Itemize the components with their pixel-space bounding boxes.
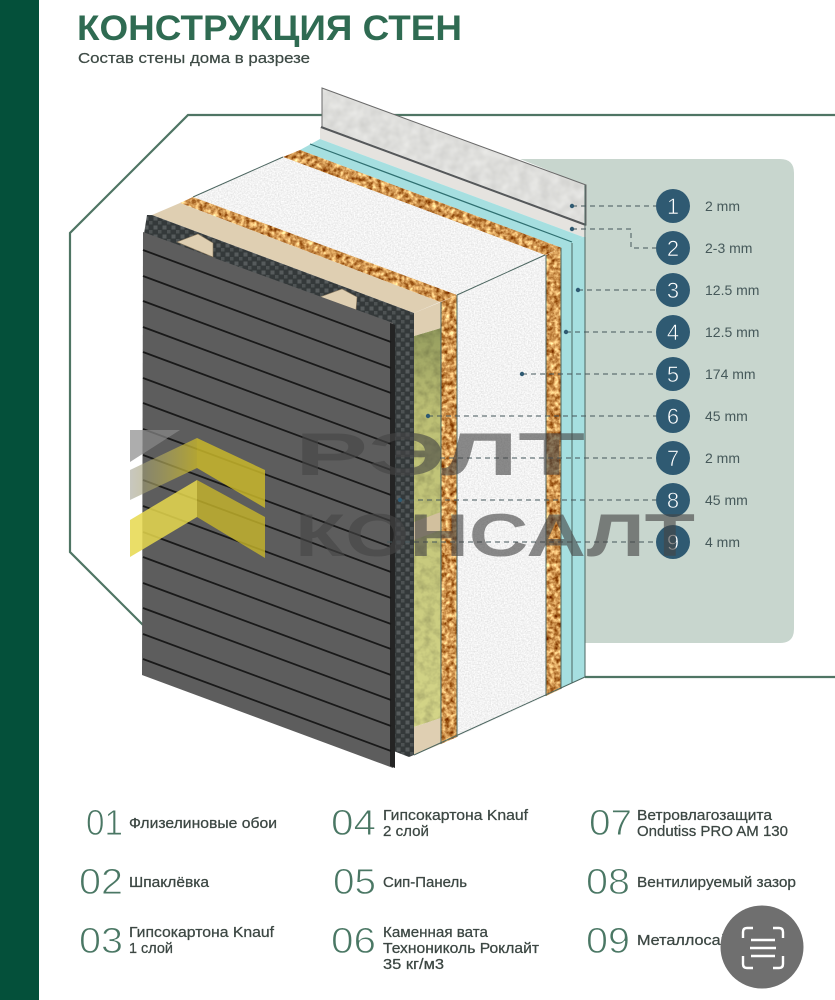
numbered markers and sizes: 45 mm bbox=[705, 408, 748, 424]
legend item 01 bbox=[86, 802, 277, 843]
wood block one bbox=[177, 234, 213, 257]
watermark text: РЭЛТ bbox=[295, 421, 585, 488]
OSB face left bbox=[441, 295, 457, 744]
legend item 08: 08 bbox=[586, 861, 630, 902]
legend item 06: Технониколь Роклайт bbox=[383, 941, 539, 957]
legend item 01: 01 bbox=[86, 802, 123, 843]
wood top bbox=[152, 203, 440, 313]
numbered markers and sizes: 7 bbox=[667, 446, 679, 471]
subtitle: Состав стены дома в разрезе bbox=[78, 51, 310, 67]
legend item 06: 35 кг/м3 bbox=[383, 957, 444, 973]
legend item 06 bbox=[331, 920, 539, 973]
legend item 05 bbox=[333, 861, 467, 902]
watermark bbox=[130, 421, 695, 569]
watermark: КОНСАЛТ bbox=[295, 502, 695, 569]
legend item 05: 05 bbox=[333, 861, 376, 902]
layer lines bbox=[193, 157, 585, 755]
wallpaper outline bbox=[322, 88, 586, 225]
legend item 02 bbox=[79, 861, 210, 902]
leader dots bbox=[398, 204, 580, 502]
drywall top bbox=[300, 139, 583, 248]
wallpaper layer bbox=[322, 88, 586, 225]
numbered markers and sizes: 2 mm bbox=[705, 198, 740, 214]
legend item 04: 2 слой bbox=[383, 824, 429, 840]
numbered markers and sizes: 2 bbox=[667, 236, 679, 261]
numbered markers and sizes: 2-3 mm bbox=[705, 240, 752, 256]
dimension leader lines bbox=[387, 206, 656, 542]
foam face bbox=[457, 255, 546, 737]
siding grooves bbox=[143, 250, 391, 751]
drywall joint line bbox=[310, 144, 572, 242]
panel: dimensions background bbox=[520, 159, 794, 643]
legend item 01: Флизелиновые обои bbox=[129, 816, 277, 832]
numbered markers and sizes: 5 bbox=[667, 362, 679, 387]
numbered markers and sizes: 4 mm bbox=[705, 534, 740, 550]
drywall face bbox=[561, 237, 585, 688]
wall section illustration bbox=[142, 88, 586, 768]
legend item 04 bbox=[331, 802, 529, 843]
numbered markers and sizes: 9 bbox=[667, 530, 679, 555]
left green sidebar bbox=[0, 0, 39, 1000]
wood stud bbox=[414, 512, 441, 540]
legend item 02: Шпаклёвка bbox=[129, 875, 210, 891]
title: КОНСТРУКЦИЯ СТЕН bbox=[77, 9, 462, 48]
numbered markers and sizes: 12.5 mm bbox=[705, 324, 759, 340]
legend item 08: Вентилируемый зазор bbox=[637, 875, 796, 891]
membrane top bbox=[143, 215, 414, 340]
numbered markers and sizes: 4 bbox=[667, 320, 679, 345]
numbered markers and sizes: 3 bbox=[667, 278, 679, 303]
siding edge bbox=[390, 323, 395, 768]
numbered markers and sizes: 1 bbox=[667, 194, 679, 219]
watermark logo bbox=[130, 430, 265, 558]
legend item 03: 03 bbox=[79, 920, 123, 961]
legend item 03 bbox=[79, 920, 275, 961]
green outline frame bbox=[70, 115, 835, 677]
wood face bbox=[414, 302, 441, 755]
OSB face right bbox=[546, 248, 561, 696]
legend item 07 bbox=[589, 802, 788, 843]
numbered markers and sizes: 8 bbox=[667, 488, 679, 513]
upper OSB top bbox=[283, 150, 562, 255]
legend item 03: 1 слой bbox=[129, 941, 173, 957]
legend item 07: 07 bbox=[589, 802, 632, 843]
wallpaper edge line bbox=[321, 127, 586, 225]
legend item 04: Гипсокартона Knauf bbox=[383, 808, 529, 824]
numbered markers and sizes bbox=[656, 189, 759, 559]
wood block two bbox=[320, 289, 357, 310]
lower OSB top bbox=[180, 197, 457, 302]
legend item 09 bbox=[586, 920, 763, 961]
putty layer bbox=[320, 127, 586, 237]
numbered markers and sizes: 12.5 mm bbox=[705, 282, 759, 298]
numbered markers and sizes: 2 mm bbox=[705, 450, 740, 466]
wool face bbox=[414, 328, 441, 727]
legend item 05: Сип-Панель bbox=[383, 875, 467, 891]
legend item 06: Каменная вата bbox=[383, 925, 489, 941]
legend bbox=[79, 802, 796, 973]
legend item 09: Металлосайдинг bbox=[637, 933, 763, 949]
legend item 02: 02 bbox=[79, 861, 123, 902]
numbered markers and sizes: 45 mm bbox=[705, 492, 748, 508]
legend item 03: Гипсокартона Knauf bbox=[129, 925, 275, 941]
legend item 07: Ветровлагозащита bbox=[637, 808, 773, 824]
legend item 07: Ondutiss PRO AM 130 bbox=[637, 824, 788, 840]
numbered markers and sizes: 174 mm bbox=[705, 366, 756, 382]
icon: scan button bbox=[720, 906, 804, 988]
numbered markers and sizes: 6 bbox=[667, 404, 679, 429]
legend item 04: 04 bbox=[331, 802, 376, 843]
legend item 09: 09 bbox=[586, 920, 630, 961]
siding bbox=[142, 232, 393, 768]
SIP foam top bbox=[193, 157, 545, 295]
legend item 08 bbox=[586, 861, 796, 902]
legend item 06: 06 bbox=[331, 920, 376, 961]
membrane face bbox=[391, 313, 414, 757]
